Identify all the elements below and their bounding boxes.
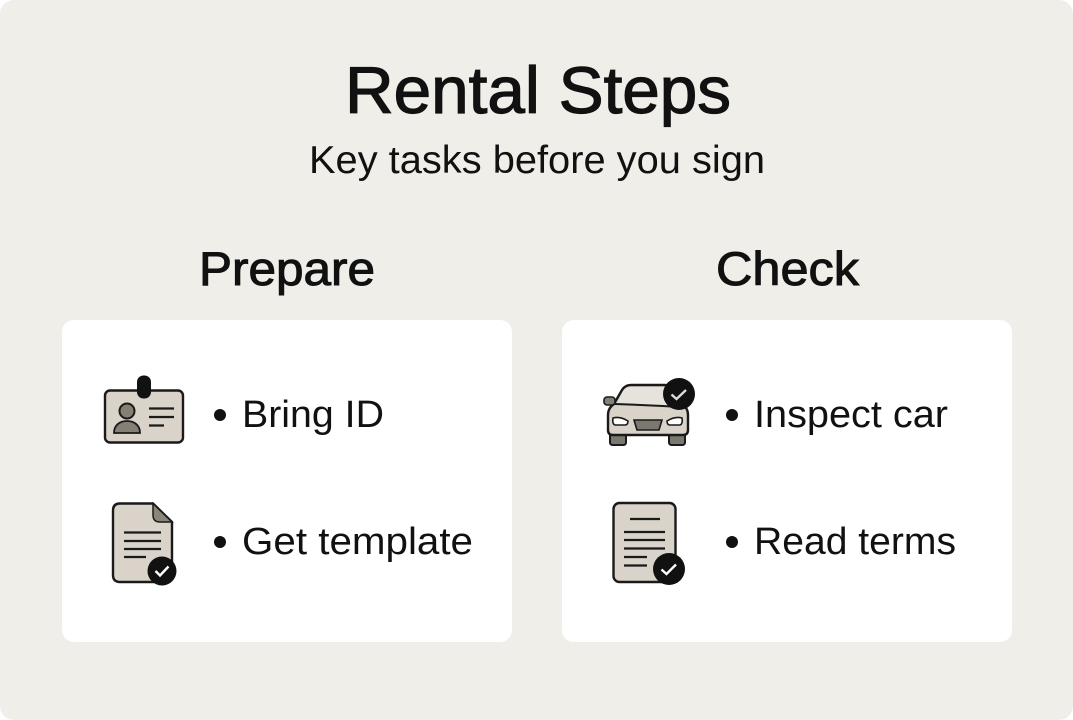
icon: ID badge: [105, 376, 183, 442]
panel: Prepare: [62, 320, 512, 642]
panel: Check: [562, 320, 1012, 642]
bullet: Bring ID: Bring ID: [242, 394, 384, 436]
bullet: Inspect car: Inspect car: [754, 394, 948, 436]
bullet: Get template: Get template: [242, 521, 473, 563]
icon: document with check: [113, 504, 176, 586]
heading: Check: Check: [716, 242, 860, 295]
heading: Prepare: Prepare: [199, 242, 375, 295]
icon: terms document with check: [614, 503, 685, 585]
subtitle: Key tasks before you sign: [309, 139, 765, 182]
bullet: Read terms: Read terms: [754, 521, 956, 563]
icon: car with check: [604, 378, 695, 445]
title: Rental Steps: [345, 53, 731, 127]
